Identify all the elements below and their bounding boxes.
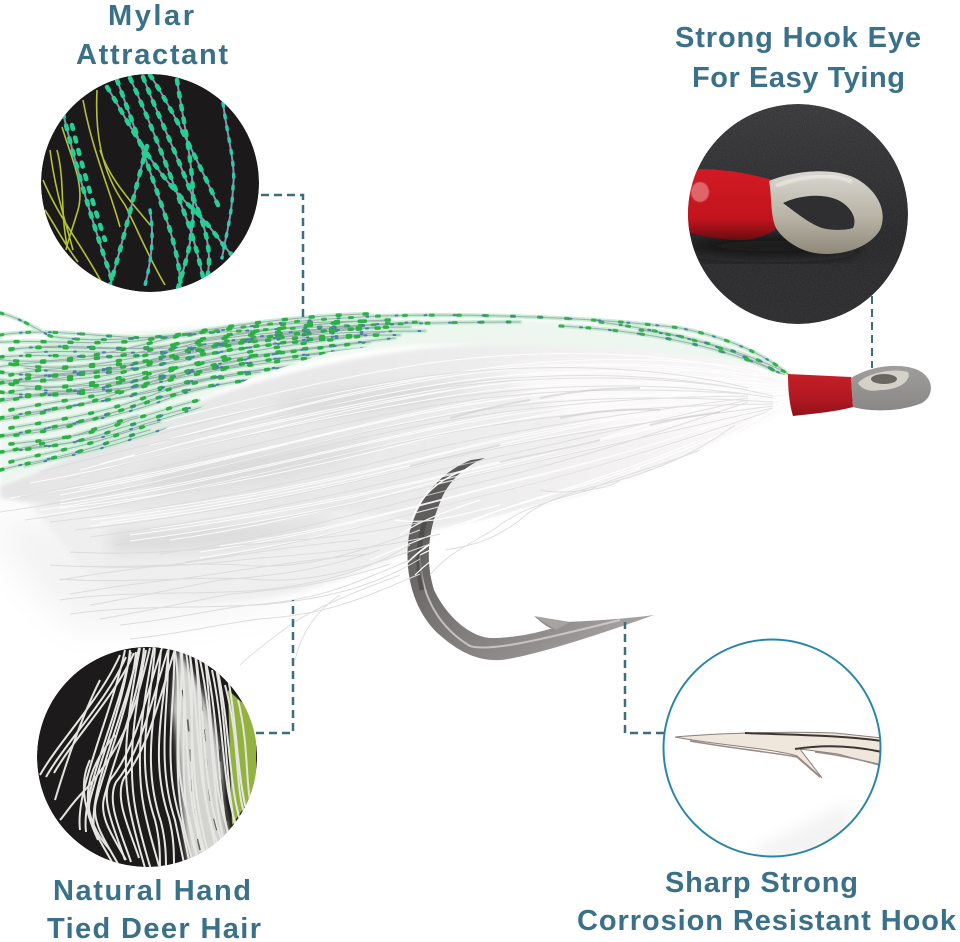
grey strand core xyxy=(0,313,788,470)
panel: hook eye detail circle xyxy=(680,104,908,324)
lower hair mass xyxy=(30,480,430,602)
heading: Sharp Strong Corrosion Resistant Hook xyxy=(577,867,957,937)
connector: mylar circle to tail xyxy=(261,195,303,318)
ring opening xyxy=(783,196,855,230)
dark backdrop xyxy=(41,74,259,292)
yellow fibres xyxy=(43,90,165,285)
hook xyxy=(407,458,654,660)
white hairs over the body xyxy=(10,353,808,558)
upper hair mass xyxy=(0,342,792,530)
long stray hairs xyxy=(240,425,735,665)
eye ring xyxy=(851,366,931,410)
heading: Strong Hook Eye For Easy Tying xyxy=(675,22,921,94)
lower stray hairs xyxy=(50,520,440,639)
heading: Mylar Attractant: Attractant xyxy=(76,39,228,71)
green fibre glow xyxy=(228,690,256,825)
lower edge xyxy=(690,741,882,777)
blue beads xyxy=(0,313,788,470)
iridescent pale band xyxy=(0,318,786,485)
hook highlight xyxy=(420,555,620,648)
faint background smudge xyxy=(768,813,846,856)
contact shadow xyxy=(680,235,860,257)
dark ridge lines xyxy=(745,733,882,752)
connector: deer hair circle to hair xyxy=(256,600,293,733)
soft shadow behind the fly tail xyxy=(0,510,300,630)
eye shadow xyxy=(871,374,897,384)
heading: Sharp Strong Corrosion Resistant Hook: Corrosion Resistant Hook xyxy=(577,905,957,937)
hook point body xyxy=(675,732,882,778)
green beads xyxy=(0,314,410,470)
ring highlight xyxy=(776,176,852,186)
heading: Sharp Strong Corrosion Resistant Hook: Sharp Strong xyxy=(665,867,858,899)
fabric texture xyxy=(688,104,908,324)
mylar strands xyxy=(0,313,788,470)
mesh hairs at the lower edge xyxy=(370,402,790,575)
heading: Strong Hook Eye For Easy Tying: For Easy Tying xyxy=(692,62,905,94)
dense white hair mass xyxy=(172,650,232,868)
sparse green beads along the top xyxy=(0,313,788,376)
bright hair highlight near the head xyxy=(500,364,790,430)
grey fibres through the body xyxy=(0,367,773,562)
hook eye xyxy=(851,366,931,410)
heading: Natural Hand Tied Deer Hair xyxy=(47,875,261,942)
heading: Strong Hook Eye For Easy Tying: Strong Hook Eye xyxy=(675,22,921,54)
grey hair shading xyxy=(110,385,480,553)
red thread wrap xyxy=(688,169,777,240)
dark backdrop xyxy=(37,647,257,867)
hook barb xyxy=(534,616,570,630)
eye opening xyxy=(858,370,909,391)
teal ring xyxy=(664,640,880,856)
heading: Mylar Attractant: Mylar xyxy=(108,0,194,32)
red thread head xyxy=(788,374,853,416)
grey strand cores xyxy=(63,75,234,290)
dark gaps in the mass xyxy=(182,670,230,850)
circle fill xyxy=(664,640,880,856)
panel: deer hair detail circle xyxy=(37,646,257,870)
connector: hook eye circle to eye xyxy=(871,296,873,368)
left stray hairs xyxy=(55,648,250,850)
hook dark edge xyxy=(419,520,425,590)
grey hair streaks near the head xyxy=(410,388,720,466)
thread shine xyxy=(691,182,709,202)
panel: mylar detail circle xyxy=(41,74,259,292)
dark fabric backdrop xyxy=(688,104,908,324)
thin blue-green beads xyxy=(145,103,234,285)
clipped hook point xyxy=(675,732,882,860)
connector: barb circle to hook point xyxy=(625,622,664,733)
silver ring xyxy=(769,171,883,254)
white hair strands xyxy=(40,646,252,870)
panel: barb detail circle xyxy=(664,640,882,860)
fly body: white deer hair and mylar xyxy=(0,313,931,665)
heading: Natural Hand Tied Deer Hair: Natural Hand xyxy=(53,875,251,907)
heading: Mylar Attractant xyxy=(76,0,228,71)
hook shank and bend xyxy=(407,458,654,660)
pale strand bed xyxy=(0,313,788,470)
green beads xyxy=(63,75,232,290)
